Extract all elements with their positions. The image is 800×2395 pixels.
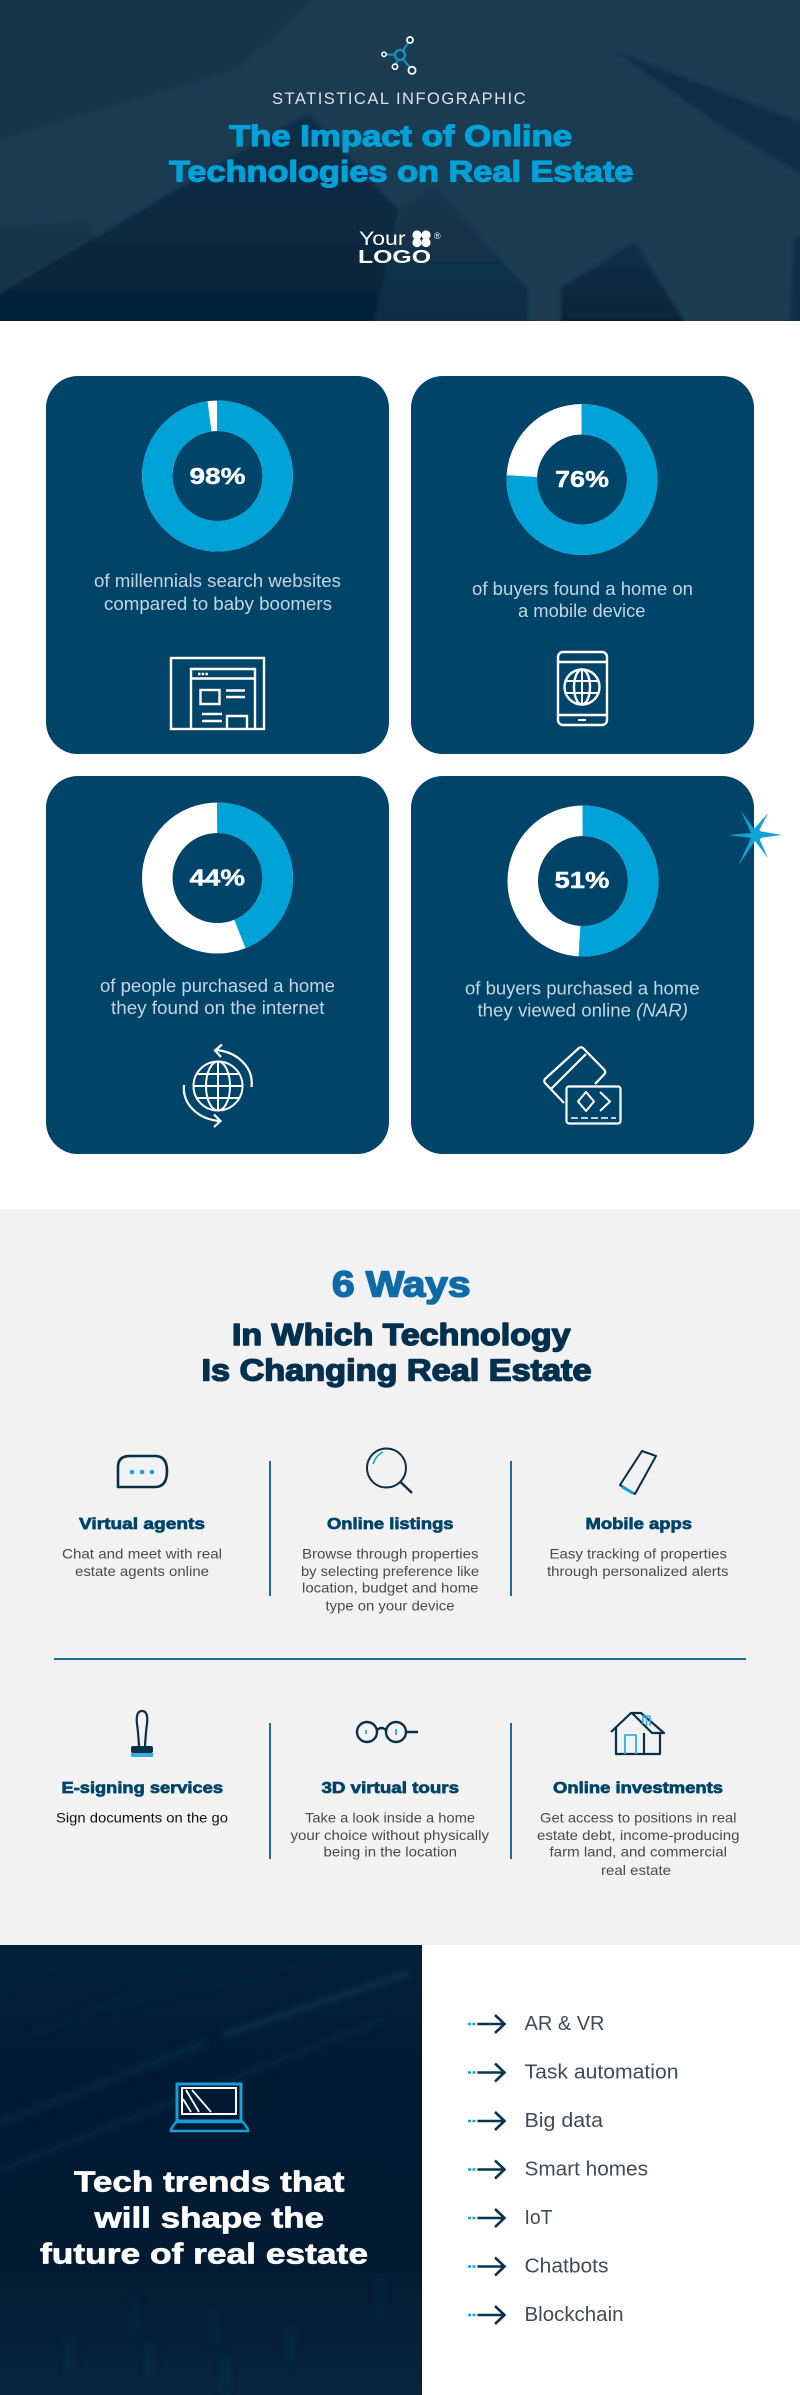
icon: molecule network xyxy=(382,37,416,74)
arrow item: IoT xyxy=(468,2207,552,2229)
panel: 6 ways section xyxy=(0,1209,800,1945)
title: Online listings xyxy=(327,1516,454,1533)
icon: phone with globe xyxy=(558,652,607,725)
panel: stat 44% xyxy=(46,776,389,1154)
arrow item: Task automation: Task automation xyxy=(524,2062,678,2084)
description: type on your device xyxy=(326,1598,455,1614)
arrow item: AR & VR: AR & VR xyxy=(524,2013,604,2035)
description xyxy=(472,579,693,621)
item: online investments xyxy=(537,1713,740,1878)
heading: tech trends: will shape the xyxy=(93,2202,324,2234)
heading: tech trends: Tech trends that xyxy=(74,2166,345,2198)
heading: subtitle: In Which Technology xyxy=(232,1317,571,1352)
description xyxy=(537,1810,740,1878)
description: Take a look inside a home xyxy=(305,1810,475,1826)
title: Mobile apps xyxy=(586,1516,692,1533)
donut chart 51% xyxy=(523,821,643,941)
panel: tech trends xyxy=(0,1945,422,2395)
description: of buyers found a home on xyxy=(472,579,693,599)
icon: rotating globe xyxy=(184,1044,252,1127)
description: they found on the internet xyxy=(111,998,324,1018)
value 51%: 51% xyxy=(554,867,610,893)
description xyxy=(94,571,341,614)
heading: 6 Ways: 6 Ways xyxy=(332,1264,470,1304)
donut chart 98% xyxy=(157,416,278,536)
description: being in the location xyxy=(324,1844,457,1860)
heading: subtitle: Is Changing Real Estate xyxy=(202,1352,592,1388)
title: Technologies on Real Estate xyxy=(169,156,634,188)
arrow item: Task automation xyxy=(468,2062,678,2084)
icon: laptop xyxy=(171,2084,248,2131)
description xyxy=(465,978,700,1020)
description: location, budget and home xyxy=(302,1580,479,1596)
arrow item: Smart homes xyxy=(468,2158,648,2180)
icon: web page xyxy=(171,658,264,729)
description: by selecting preference like xyxy=(301,1563,479,1579)
value 76%: 76% xyxy=(555,466,609,492)
description: they viewed online (NAR) xyxy=(478,1000,688,1020)
description xyxy=(301,1546,479,1614)
panel: stat 76% xyxy=(411,376,754,754)
eyebrow label: STATISTICAL INFOGRAPHIC xyxy=(272,90,526,108)
arrow item: Chatbots xyxy=(468,2256,608,2278)
item: online listings xyxy=(301,1448,479,1614)
description: Browse through properties xyxy=(302,1546,478,1562)
logo: Your xyxy=(359,229,406,250)
heading: tech trends: future of real estate xyxy=(40,2238,368,2270)
description: real estate xyxy=(601,1862,671,1878)
arrow item: AR & VR xyxy=(468,2013,604,2035)
arrow item: Big data xyxy=(468,2110,604,2132)
description: of people purchased a home xyxy=(100,976,335,996)
icon: chat bubble xyxy=(118,1456,167,1487)
title xyxy=(169,120,634,188)
title: E-signing services xyxy=(62,1780,223,1797)
heading: tech trends xyxy=(40,2166,368,2270)
description: through personalized alerts xyxy=(547,1563,728,1579)
description: Easy tracking of properties xyxy=(550,1546,727,1562)
title: Online investments xyxy=(553,1780,723,1797)
value 98%: 98% xyxy=(190,463,246,489)
title: 3D virtual tours xyxy=(322,1780,459,1797)
title: Virtual agents xyxy=(79,1516,205,1533)
panel: stat 51% xyxy=(411,776,754,1154)
description xyxy=(100,976,335,1018)
item: mobile apps xyxy=(547,1451,728,1579)
item: virtual agents xyxy=(62,1456,222,1579)
description xyxy=(62,1546,222,1579)
description: Chat and meet with real xyxy=(62,1546,222,1562)
icon: glasses xyxy=(356,1722,418,1742)
icon: house xyxy=(611,1713,664,1754)
description xyxy=(290,1810,489,1860)
description: compared to baby boomers xyxy=(104,594,332,614)
description: of buyers purchased a home xyxy=(465,978,700,998)
title: The Impact of Online xyxy=(229,120,572,153)
arrow item: Big data: Big data xyxy=(524,2110,604,2132)
donut chart 76% xyxy=(522,419,642,540)
header banner xyxy=(0,0,800,340)
icon: stamp xyxy=(131,1711,153,1757)
description xyxy=(547,1546,728,1579)
description: your choice without physically xyxy=(290,1827,489,1843)
icon: tilted phone xyxy=(620,1451,656,1494)
description: of millennials search websites xyxy=(94,571,341,591)
list: tech trends xyxy=(468,2013,678,2326)
arrow item: Chatbots: Chatbots xyxy=(524,2256,608,2278)
item: e-signing services xyxy=(56,1711,228,1826)
logo: LOGO xyxy=(358,247,431,267)
description: Get access to positions in real xyxy=(540,1810,736,1826)
description: Sign documents on the go xyxy=(56,1810,228,1826)
description: estate agents online xyxy=(75,1563,209,1579)
arrow item: Blockchain: Blockchain xyxy=(524,2304,624,2326)
description: estate debt, income-producing xyxy=(537,1827,740,1843)
logo: ® xyxy=(434,231,441,241)
heading: subtitle xyxy=(202,1317,592,1388)
icon: sparkle star xyxy=(728,811,782,866)
icon: magnifier xyxy=(367,1448,412,1493)
description: a mobile device xyxy=(518,601,646,621)
icon: credit cards xyxy=(544,1047,620,1124)
value 44%: 44% xyxy=(190,864,245,890)
donut chart 44% xyxy=(157,818,278,938)
logo xyxy=(360,230,440,263)
arrow item: Blockchain xyxy=(468,2304,624,2326)
item: 3D virtual tours xyxy=(290,1722,489,1860)
arrow item: Smart homes: Smart homes xyxy=(524,2158,648,2180)
arrow item: IoT: IoT xyxy=(524,2207,552,2229)
description: farm land, and commercial xyxy=(550,1844,727,1860)
panel: stat 98% xyxy=(46,376,389,754)
